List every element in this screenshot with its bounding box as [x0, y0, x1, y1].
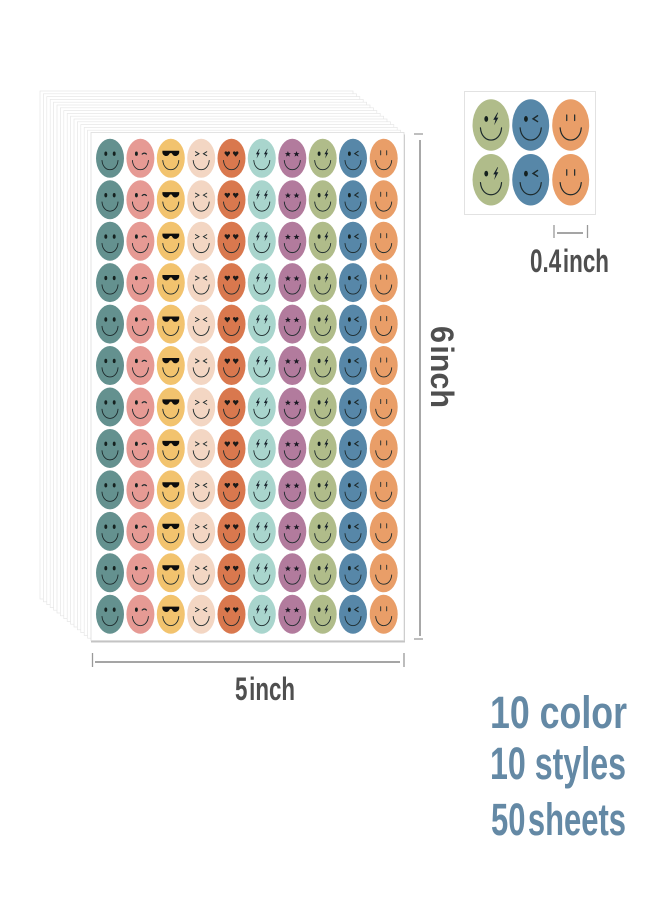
- sticker row 12: [96, 595, 398, 634]
- sticker row 6: [96, 346, 398, 385]
- stack of sticker sheets: [40, 91, 401, 638]
- front sticker sheet: [91, 132, 405, 642]
- width label: 5 inch: 5 inch: [235, 671, 295, 707]
- feature: 10 color: 10 color: [490, 687, 627, 738]
- close-up sticker: peach lower: [552, 154, 589, 205]
- sticker size label: 0.4 inch: 0.4 inch: [530, 243, 609, 279]
- sticker row 9: [96, 470, 398, 509]
- close-up sticker: sage bolt: [473, 99, 509, 151]
- sticker row 7: [96, 388, 398, 426]
- feature list: [490, 687, 627, 845]
- close-up sticker: sage bolt lower: [473, 154, 509, 205]
- close-up sticker: blue wink: [512, 99, 549, 151]
- sticker row 4: [96, 263, 398, 302]
- sticker size dimension arrow: [554, 225, 588, 238]
- close-up sticker: blue wink lower: [512, 154, 549, 205]
- width dimension arrow: [92, 653, 404, 667]
- sticker row 10: [96, 512, 398, 551]
- sticker row 5: [96, 305, 398, 344]
- close-up sticker: peach: [552, 99, 589, 151]
- inset panel: sticker close-up: [464, 92, 596, 214]
- sticker row 3: [96, 222, 398, 261]
- sticker row 2: [96, 180, 398, 219]
- height dimension arrow: [414, 134, 423, 639]
- sticker row 1: [96, 139, 398, 178]
- sticker row 11: [96, 553, 398, 592]
- height label: 6 inch: 6 inch: [424, 326, 460, 408]
- sticker row 8: [96, 429, 398, 468]
